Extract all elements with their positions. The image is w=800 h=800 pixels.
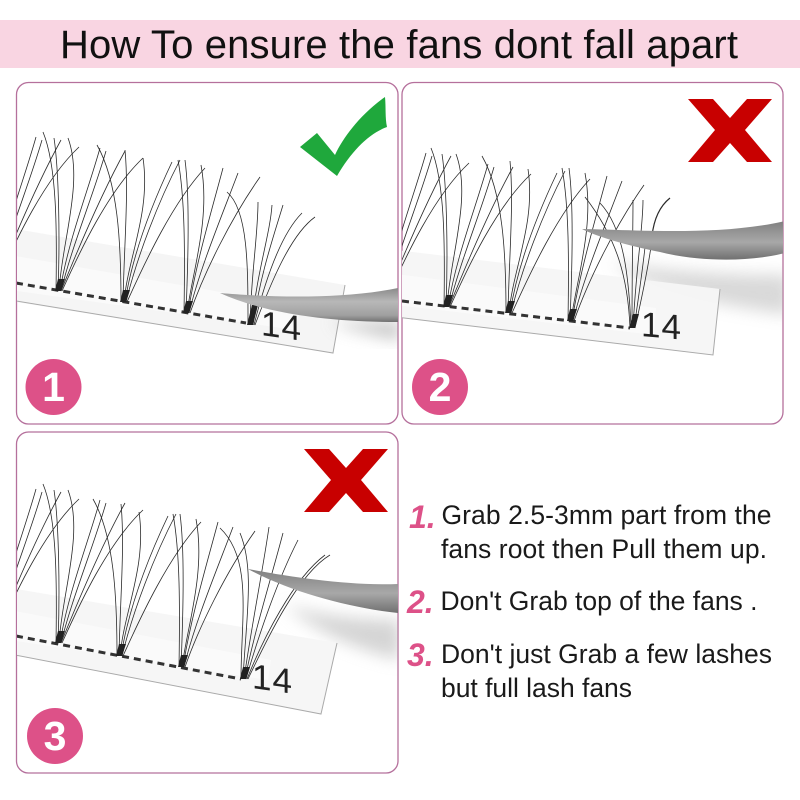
step 2 text: 2. [406, 584, 434, 620]
step 1 text: Grab 2.5-3mm part from the [442, 500, 772, 530]
badge 1 [26, 359, 82, 415]
step 3 text [407, 637, 772, 703]
panel 3: wrong grip few lashes [0, 432, 400, 773]
step 1 text: fans root then Pull them up. [441, 534, 767, 564]
step 3 text: but full lash fans [441, 673, 632, 703]
step 2 text: Don't Grab top of the fans . [440, 586, 758, 616]
badge 3 [27, 708, 83, 764]
step 1 text: 1. [409, 499, 436, 535]
badge 2: 2 [429, 364, 451, 410]
tweezers 1 [220, 288, 400, 340]
icon: green check [300, 97, 387, 176]
badge 2 [412, 359, 468, 415]
step 3 text: Don't just Grab a few lashes [441, 639, 772, 669]
tweezers 2 [582, 221, 785, 260]
title banner: How To ensure the fans dont fall apart [60, 23, 738, 67]
step 1 text [409, 499, 772, 564]
tweezers 3 [248, 569, 398, 613]
lash strip card 1: 14 [261, 304, 302, 349]
panel 2: wrong grip at top [369, 82, 790, 424]
lash fans 2 [402, 148, 670, 328]
lash strip card 1 [10, 228, 345, 353]
icon: red cross 3 [304, 449, 388, 512]
step 3 text: 3. [407, 637, 434, 673]
lash fans 1 [0, 121, 315, 325]
lash strip card 2: 14 [641, 305, 682, 348]
lash strip card 3: 14 [252, 657, 293, 702]
badge 3: 3 [44, 713, 66, 759]
badge 1: 1 [42, 364, 65, 410]
lash fans 3 [0, 473, 330, 679]
panel 1: correct grip [0, 82, 400, 424]
lash strip card 3 [10, 588, 400, 714]
lash strip card 2 [396, 250, 790, 355]
instructions [406, 499, 772, 703]
icon: red cross 2 [688, 99, 772, 162]
